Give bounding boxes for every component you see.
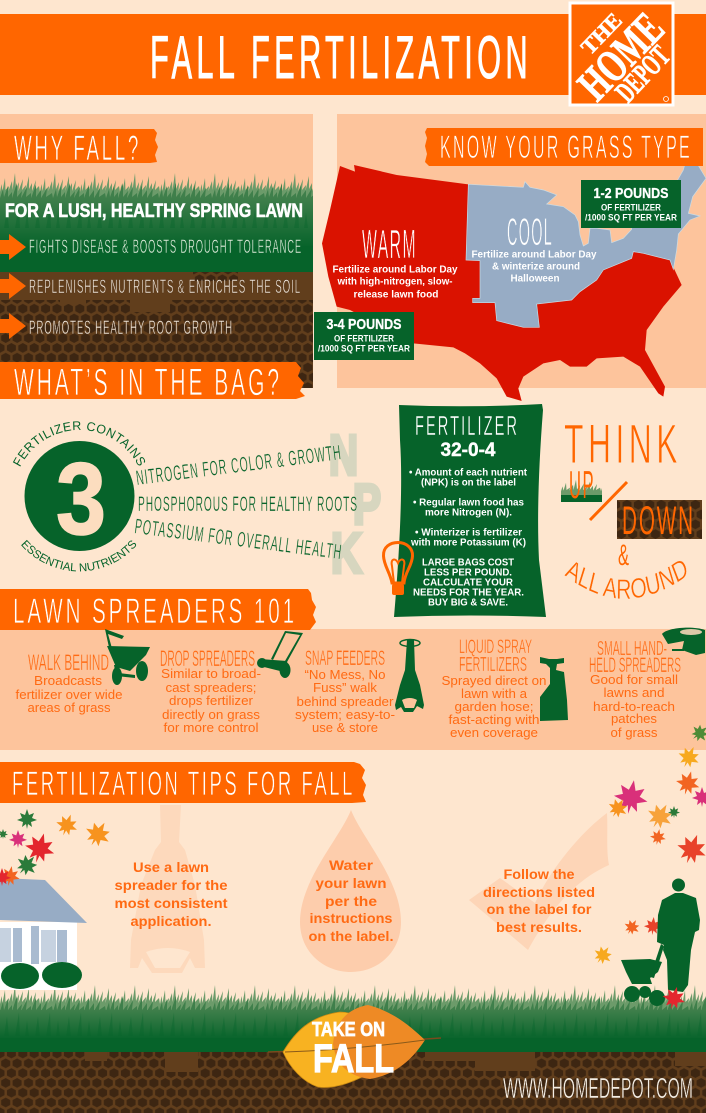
subheading: FOR A LUSH, HEALTHY SPRING LAWN xyxy=(5,200,303,222)
nutrient list xyxy=(133,441,358,564)
callout: 3-4 pounds: OF FERTILIZER xyxy=(334,334,394,344)
icon: drop spreader xyxy=(257,631,303,678)
yellow leaf xyxy=(283,1012,385,1087)
drop spreaders: for more control xyxy=(164,720,259,735)
fertilizer bag: 32-0-4 xyxy=(440,440,496,461)
ground: soil xyxy=(0,1052,706,1113)
snap feeders xyxy=(295,647,395,735)
walk behind: fertilizer over wide xyxy=(16,687,122,702)
liquid spray fertilizers xyxy=(442,637,546,740)
tip: lawn spreader: spreader for the xyxy=(114,877,228,893)
small hand-held spreaders: hard-to-reach xyxy=(593,699,675,714)
tip: lawn spreader: Use a lawn xyxy=(133,859,209,875)
panel: why fall: REPLENISHES NUTRIENTS & ENRICHES THE SOIL xyxy=(29,276,301,298)
fertilizer bag: • Regular lawn food has xyxy=(413,498,524,508)
icon: hand-held spreader xyxy=(662,628,705,655)
icon: light bulb xyxy=(383,542,413,595)
gardener with spreader xyxy=(621,879,700,1006)
drop spreaders: cast spreaders; xyxy=(166,680,256,695)
tip: water xyxy=(300,810,401,972)
title banner xyxy=(0,14,706,95)
fertilizer bag: • Winterizer is fertilizer xyxy=(415,528,522,538)
tip: follow directions xyxy=(469,813,609,950)
soil band xyxy=(0,272,313,388)
snap feeders: behind spreader xyxy=(296,694,394,709)
drop spreaders: directly on grass xyxy=(162,707,261,722)
badge: take on fall leaf xyxy=(268,1005,441,1087)
snap feeders: Fuss” walk xyxy=(313,680,378,695)
warm label: Fertilize around Labor Day xyxy=(332,264,458,276)
panel: lawn spreaders 101 xyxy=(0,589,706,750)
callout: 3-4 pounds xyxy=(314,312,414,360)
heading band: lawn spreaders xyxy=(0,589,316,631)
panel: lawn spreaders 101: DROP SPREADERS xyxy=(160,646,255,671)
panel: know your grass type xyxy=(314,114,706,401)
fertilizer bag: (NPK) is on the label xyxy=(421,478,516,488)
think up / down and all around xyxy=(561,412,702,599)
leaves: near gardener xyxy=(590,916,663,968)
fertilizer bag: FERTILIZER xyxy=(415,410,519,441)
roof xyxy=(0,878,87,923)
tip: follow directions: Follow the xyxy=(504,866,575,882)
walk behind xyxy=(16,650,122,715)
cool region xyxy=(466,160,706,327)
liquid spray fertilizers: Sprayed direct on xyxy=(442,673,546,688)
fertilizer bag: LARGE BAGS COST xyxy=(422,558,514,568)
small hand-held spreaders xyxy=(589,638,681,740)
fertilizer bag: NEEDS FOR THE YEAR. xyxy=(413,588,524,598)
badge: 3 essential nutrients xyxy=(12,421,146,572)
stem xyxy=(268,1038,441,1052)
tip: follow directions: best results. xyxy=(496,919,582,935)
leaf text: TAKE ON xyxy=(312,1019,385,1041)
tip: water: Water xyxy=(329,857,374,873)
snap feeders: use & store xyxy=(312,720,378,735)
snap feeders: system; easy-to- xyxy=(295,707,395,722)
small hand-held spreaders: patches xyxy=(611,711,657,726)
tip: water: on the label. xyxy=(308,928,394,944)
npk letters xyxy=(329,424,381,586)
tip: water: per the xyxy=(325,893,377,909)
callout: 1-2 pounds: /1000 SQ FT PER YEAR xyxy=(585,212,677,222)
warm label: WARM xyxy=(362,221,417,267)
walk behind: areas of grass xyxy=(28,700,111,715)
cool label: Fertilize around Labor Day xyxy=(472,250,597,260)
nutrient list: NITROGEN FOR COLOR & GROWTH xyxy=(135,441,343,490)
small hand-held spreaders: lawns and xyxy=(604,685,664,700)
callout: 1-2 pounds: OF FERTILIZER xyxy=(601,202,661,212)
npk letters: P xyxy=(353,472,381,536)
callout: 3-4 pounds: /1000 SQ FT PER YEAR xyxy=(318,344,410,354)
small hand-held spreaders: Good for small xyxy=(590,672,678,687)
warm region xyxy=(322,165,682,401)
ampersand: & xyxy=(618,539,629,572)
icon: walk behind spreader xyxy=(105,629,150,685)
slash xyxy=(590,482,627,520)
icon: snap feeder xyxy=(395,640,424,712)
walk behind: WALK BEHIND xyxy=(28,650,109,675)
logo: The Home Depot: DEPOT xyxy=(609,39,677,109)
callout: 1-2 pounds xyxy=(581,180,681,228)
ghost icon: snap feeder xyxy=(130,805,205,973)
tip: lawn spreader xyxy=(114,805,228,973)
snap feeders: SNAP FEEDERS xyxy=(305,647,385,670)
heading band: why fall: WHY FALL? xyxy=(14,129,141,168)
house xyxy=(0,878,87,990)
fertilizer bag: BUY BIG & SAVE. xyxy=(428,598,508,608)
arrow 1 xyxy=(0,234,26,260)
warm label xyxy=(332,221,458,300)
badge: 3 essential nutrients: ESSENTIAL NUTRIENTS xyxy=(21,540,136,572)
up with grass xyxy=(561,464,602,507)
heading band: lawn spreaders: LAWN SPREADERS 101 xyxy=(13,592,297,631)
heading band: what's in the bag xyxy=(0,362,305,404)
heading band: what's in the bag: WHAT’S IN THE BAG? xyxy=(14,362,282,404)
npk letters: K xyxy=(331,522,362,586)
nutrient list: POTASSIUM FOR OVERALL HEALTH xyxy=(133,515,344,564)
callout: 3-4 pounds: 3-4 POUNDS xyxy=(326,316,402,333)
liquid spray fertilizers: fast-acting with xyxy=(448,712,540,727)
npk letters: N xyxy=(329,424,358,488)
liquid spray fertilizers: FERTILIZERS xyxy=(459,654,527,676)
snap feeders: “No Mess, No xyxy=(304,667,386,682)
drop spreaders xyxy=(160,646,261,735)
cool label: Halloween xyxy=(510,274,560,284)
icon: spray bottle xyxy=(540,657,568,721)
liquid spray fertilizers: LIQUID SPRAY xyxy=(459,637,532,658)
fertilizer bag: with more Potassium (K) xyxy=(410,538,526,548)
tip: follow directions: on the label for xyxy=(486,901,592,917)
panel: why fall xyxy=(0,114,313,388)
small hand-held spreaders: of grass xyxy=(610,725,658,740)
liquid spray fertilizers: garden hose; xyxy=(454,699,534,714)
tip: water: your lawn xyxy=(316,875,386,891)
tip: follow directions: directions listed xyxy=(483,884,595,900)
logo: The Home Depot: THE xyxy=(576,8,627,59)
ghost icon: water drop xyxy=(300,810,401,972)
drop spreaders: drops fertilizer xyxy=(169,693,254,708)
drop spreaders: Similar to broad- xyxy=(161,666,261,681)
walk behind: Broadcasts xyxy=(34,673,103,688)
liquid spray fertilizers: lawn with a xyxy=(461,686,528,701)
cool label: COOL xyxy=(507,211,553,254)
badge: 3 essential nutrients: FERTILIZER CONTAINS xyxy=(12,421,146,466)
windows xyxy=(0,926,67,964)
orange leaf xyxy=(333,1005,425,1079)
warm label: with high-nitrogen, slow- xyxy=(337,276,452,288)
bushes xyxy=(1,962,82,989)
cool label: & winterize around xyxy=(492,262,580,272)
ground: grass xyxy=(0,982,706,1052)
callout: 1-2 pounds: 1-2 POUNDS xyxy=(594,185,668,202)
badge: take on fall leaf: FALL xyxy=(313,1037,394,1081)
leaf vein xyxy=(285,1040,425,1052)
liquid spray fertilizers: even coverage xyxy=(450,725,538,740)
arrow 2 xyxy=(0,273,26,299)
leaf: red ground xyxy=(660,984,688,1012)
fertilizer bag: LESS PER POUND. xyxy=(424,568,512,578)
tip: water: instructions xyxy=(310,910,393,926)
map of USA xyxy=(322,160,706,401)
text: PHOSPHOROUS FOR HEALTHY ROOTS xyxy=(138,493,358,516)
tip: lawn spreader: application. xyxy=(130,913,212,929)
panel: why fall: FIGHTS DISEASE & BOOSTS DROUGHT TOLERANCE xyxy=(29,236,302,258)
warm label: release lawn food xyxy=(354,290,438,300)
fertilizer bag: more Nitrogen (N). xyxy=(425,508,512,518)
cool label xyxy=(472,211,597,284)
heading band: fertilization tips xyxy=(0,762,366,803)
fertilizer bag xyxy=(394,404,546,617)
fertilizer bag: • Amount of each nutrient xyxy=(409,468,528,478)
heading band: why fall xyxy=(0,129,158,168)
arrow 3 xyxy=(0,313,26,339)
badge: 3 essential nutrients: 3 xyxy=(56,442,106,556)
ghost icon: check mark xyxy=(469,813,609,950)
leaves: upper right xyxy=(604,720,706,868)
spreader silhouette xyxy=(621,959,662,984)
up with grass: UP xyxy=(569,464,595,507)
lawn grass band xyxy=(0,170,313,272)
fertilizer bag: CALCULATE YOUR xyxy=(423,578,514,588)
all around: ALL AROUND xyxy=(564,560,686,599)
heading band: fertilization tips: FERTILIZATION TIPS FOR FALL xyxy=(12,765,355,803)
panel: why fall: PROMOTES HEALTHY ROOT GROWTH xyxy=(29,317,233,339)
leaves: upper left xyxy=(0,809,116,888)
gardener silhouette xyxy=(657,879,700,992)
tip: lawn spreader: most consistent xyxy=(114,895,228,911)
